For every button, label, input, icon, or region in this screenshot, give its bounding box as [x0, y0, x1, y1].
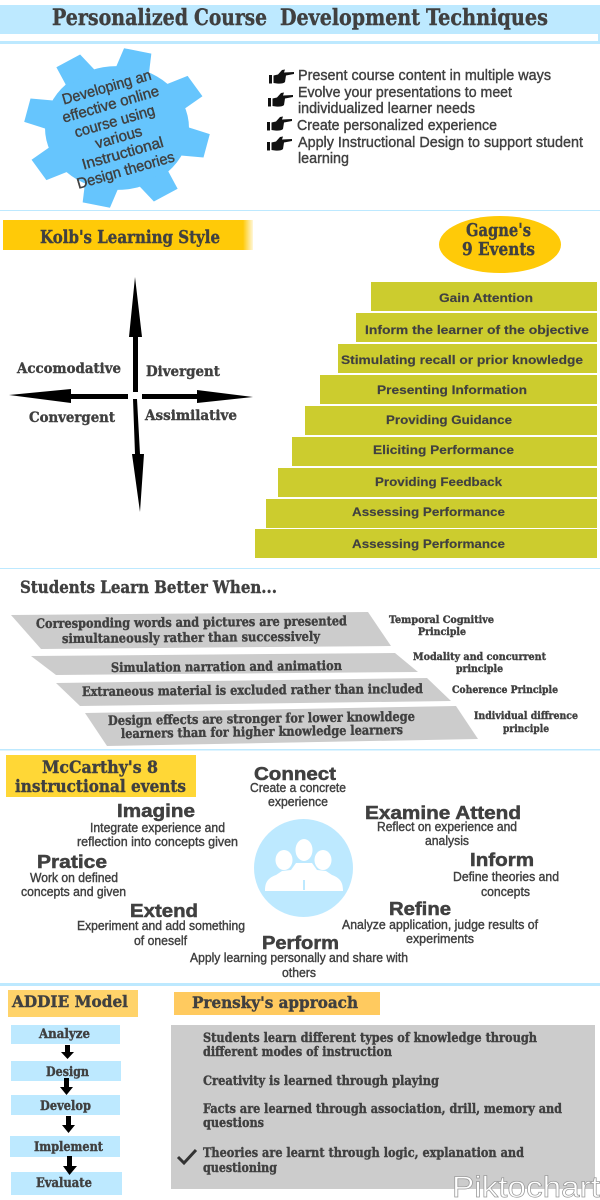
heading: Gagne's 9 Events: 9 Events	[462, 239, 535, 260]
gear with intro text: effective online	[60, 83, 161, 127]
event: Connect	[250, 764, 346, 809]
title banner: Development	[280, 5, 421, 31]
ADDIE flow: Analyze	[38, 1027, 90, 1042]
gear with intro text: course using	[73, 102, 157, 141]
panel: learning principles bars	[11, 612, 478, 746]
gear with intro text: Developing an	[60, 67, 153, 109]
Kolb quadrant labels	[16, 361, 237, 426]
Gagne staircase: Providing Feedback	[375, 475, 502, 489]
panel: Prensky's approach list: questions	[203, 1116, 264, 1131]
heading: Gagne's 9 Events	[439, 216, 561, 273]
event: Examine Attend	[365, 803, 521, 848]
panel: Prensky's approach list: questioning	[203, 1161, 277, 1176]
event: Inform	[453, 850, 559, 899]
Gagne staircase: Assessing Performance	[352, 505, 505, 519]
event: Imagine	[77, 801, 238, 849]
panel: Prensky's approach list	[171, 1025, 595, 1189]
event: Inform: Define theories and	[453, 869, 559, 884]
bullet list: Evolve your presentations to meet	[298, 84, 513, 101]
event: Examine Attend: Examine Attend	[365, 803, 521, 823]
event: Refine: experiments	[406, 931, 474, 946]
Gagne staircase	[255, 282, 597, 558]
heading: McCarthy's 8 instructional events: instructional events	[15, 777, 186, 797]
bullet list: Present course content in multiple ways	[298, 67, 551, 84]
panel: learning principles bars: Corresponding words and pictures are presented	[36, 614, 347, 632]
Gagne staircase: Inform the learner of the objective	[365, 323, 589, 337]
heading: McCarthy's 8 instructional events: McCarthy's 8	[42, 758, 158, 778]
ADDIE flow: Design	[46, 1065, 89, 1080]
principle labels: Temporal Cognitive	[389, 614, 494, 626]
panel: learning principles bars: simultaneously rather than successively	[62, 630, 320, 647]
panel: learning principles bars: Simulation narration and animation	[111, 659, 343, 676]
event: Extend	[77, 901, 245, 948]
event: Connect: experience	[268, 794, 328, 809]
Gagne staircase: Presenting Information	[377, 383, 527, 397]
panel: Prensky's approach list: Students learn different types of knowledge through	[203, 1031, 537, 1046]
heading: Gagne's 9 Events: Gagne's	[466, 220, 531, 241]
title banner: Techniques	[426, 5, 548, 31]
event: Extend: Extend	[130, 901, 198, 921]
principle labels: Modality and concurrent	[413, 651, 546, 663]
title banner: Personalized	[52, 5, 188, 31]
bullet list: learning	[298, 150, 349, 167]
heading: McCarthy's 8 instructional events	[6, 755, 196, 797]
gear with intro text: Design theories	[75, 149, 177, 193]
heading: ADDIE Model: ADDIE Model	[11, 992, 128, 1011]
Kolb quadrant labels: Divergent	[146, 364, 221, 380]
heading: Prensky's approach: Prensky's approach	[192, 993, 358, 1012]
event: Perform: Perform	[262, 933, 339, 953]
gear with intro text: various	[93, 123, 144, 152]
bullet list	[267, 67, 584, 167]
event: Connect: Create a concrete	[250, 780, 346, 795]
Kolb cross arrows	[9, 277, 253, 512]
event: Refine: Analyze application, judge results of	[342, 917, 538, 932]
title banner	[0, 5, 600, 44]
event: Imagine: reflection into concepts given	[77, 834, 238, 849]
event: Extend: Experiment and add something	[77, 918, 245, 933]
event: Extend: of oneself	[134, 933, 187, 948]
event: Connect: Connect	[254, 764, 336, 784]
bullet list: individualized learner needs	[298, 100, 475, 117]
event: Examine Attend: analysis	[425, 833, 469, 848]
heading: ADDIE Model	[8, 990, 138, 1017]
panel: Prensky's approach list: Theories are learnt through logic, explanation and	[203, 1146, 524, 1161]
event: Imagine: Integrate experience and	[90, 820, 225, 835]
event: Perform	[190, 933, 408, 980]
panel: learning principles bars: learners than for higher knowledge learners	[121, 723, 403, 742]
heading: Kolb's Learning Style	[3, 220, 253, 250]
Kolb quadrant labels: Convergent	[29, 410, 116, 426]
panel: learning principles bars: Design effects are stronger for lower knowldege	[108, 710, 415, 729]
Gagne staircase: Assessing Performance	[352, 537, 505, 551]
bullet list: Create personalized experience	[297, 117, 497, 134]
gear with intro text	[24, 48, 210, 208]
panel: Prensky's approach list: Creativity is learned through playing	[203, 1074, 439, 1089]
principle labels	[389, 614, 578, 735]
panel: learning principles bars: Extraneous material is excluded rather than included	[82, 682, 423, 700]
Gagne staircase: Gain Attention	[439, 291, 533, 305]
event: Refine: Refine	[389, 899, 451, 919]
heading: Students Learn Better When: Students Learn Better When...	[20, 578, 277, 597]
event: Perform: Apply learning personally and share with	[190, 950, 408, 965]
event: Refine	[342, 899, 538, 946]
panel: Prensky's approach list: different modes of instruction	[203, 1045, 392, 1060]
event: Examine Attend: Reflect on experience and	[377, 819, 517, 834]
Kolb quadrant labels: Assimilative	[144, 408, 237, 424]
event: Inform: Inform	[470, 850, 534, 870]
ADDIE flow: Develop	[40, 1099, 91, 1114]
Gagne staircase: Eliciting Performance	[373, 443, 514, 457]
title banner: Course	[194, 5, 267, 31]
principle labels: Principle	[418, 626, 466, 638]
event: Pratice: concepts and given	[21, 884, 126, 899]
gear with intro text: Instructional	[80, 134, 165, 173]
event: Perform: others	[282, 965, 316, 980]
ADDIE flow: Evaluate	[36, 1176, 92, 1191]
principle labels: Individual diffrence	[474, 710, 578, 722]
principle labels: Coherence Principle	[452, 684, 558, 696]
principle labels: principle	[503, 723, 549, 735]
ADDIE flow	[10, 1025, 122, 1195]
event: Pratice: Pratice	[37, 852, 107, 872]
Kolb quadrant labels: Accomodative	[16, 361, 121, 377]
ADDIE flow: Implement	[34, 1140, 103, 1155]
event: Pratice: Work on defined	[30, 870, 118, 885]
Gagne staircase: Stimulating recall or prior knowledge	[341, 353, 583, 367]
principle labels: principle	[456, 663, 503, 675]
event: Inform: concepts	[481, 884, 530, 899]
Gagne staircase: Providing Guidance	[386, 413, 512, 427]
event: Pratice	[21, 852, 126, 899]
event: Imagine: Imagine	[117, 801, 195, 821]
heading: Kolb's Learning Style: Kolb's Learning Style	[40, 227, 220, 248]
bullet list: Apply Instructional Design to support student	[298, 134, 584, 151]
icon: people in circle	[254, 819, 353, 917]
